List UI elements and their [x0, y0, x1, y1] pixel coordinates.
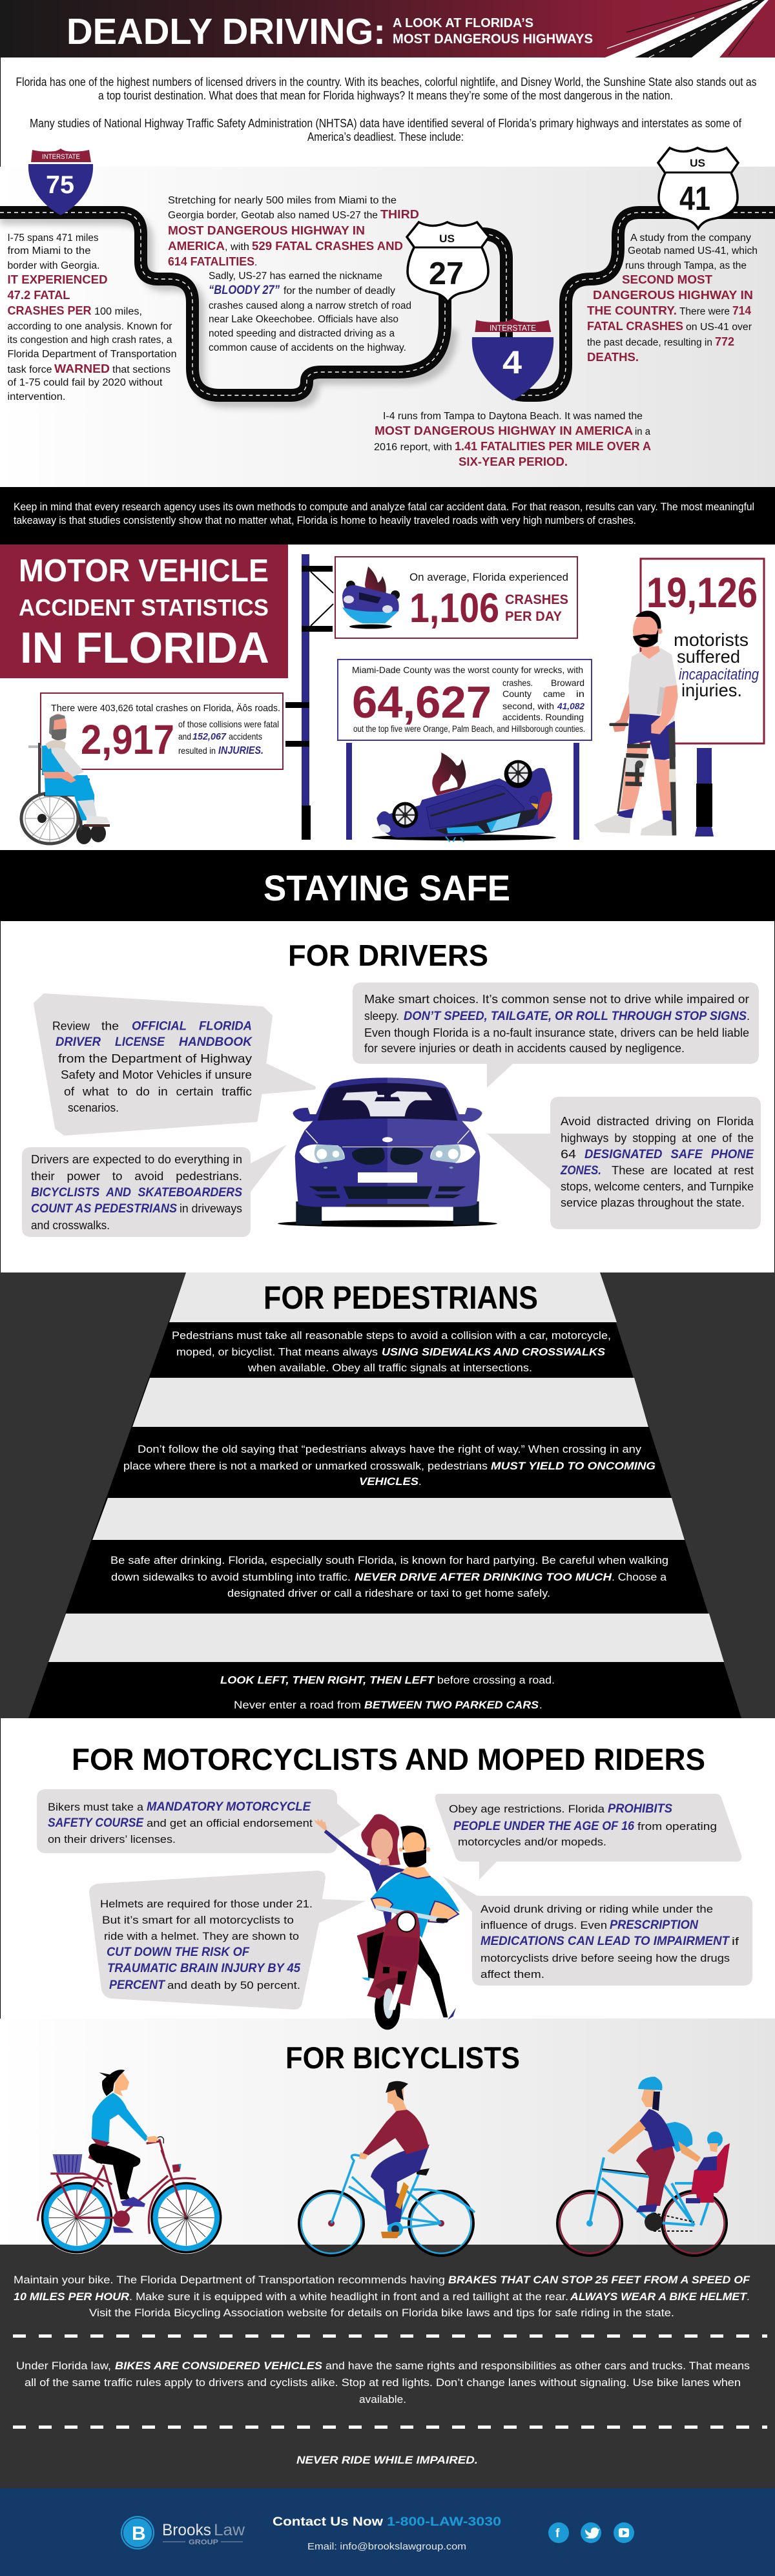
text: bikes are vehicles: Under Florida law,	[16, 2360, 111, 2372]
text: US-27: crashes caused along a narrow stretch of road	[209, 300, 411, 311]
text: I-75: that sections	[112, 364, 170, 375]
logo: Brooks Law Group: Brooks	[162, 2521, 211, 2539]
callout: driver handbook	[36, 995, 314, 1134]
callout: safe phone zones	[487, 1097, 761, 1229]
icon: US 41 shield	[658, 148, 738, 229]
text: US-27: MOST DANGEROUS HIGHWAY IN	[168, 224, 365, 237]
crosswalk stripes	[28, 1272, 741, 1718]
stat box: total crashes	[41, 693, 283, 769]
contact details: Email: info@brookslawgroup.com	[307, 2542, 466, 2552]
panel: for bicyclists background	[0, 2019, 775, 2245]
text: I-75: border with Georgia.	[8, 260, 99, 271]
text: I-4: in a	[635, 426, 650, 437]
stat box: crashes per day: CRASHES	[505, 592, 568, 607]
icon: man on blue step-through bicycle	[299, 2081, 475, 2256]
callout: driver handbook: OFFICIAL	[132, 1019, 187, 1034]
text: I-75: according to one analysis. Known for	[8, 321, 172, 332]
stat box: total crashes: INJURIES.	[218, 744, 264, 756]
callout: driver handbook: Safety and Motor Vehicles if unsure	[61, 1068, 252, 1081]
text: bikes are vehicles: all of the same traffic rules apply to drivers and cyclists alike. Stop at red lights. Don’t change lanes without signaling. Use bike lanes when	[25, 2377, 741, 2389]
text: yield to vehicles: VEHICLES	[359, 1475, 419, 1488]
callout: pedestrians and bicyclists: in driveways	[180, 1202, 242, 1215]
icon: interstate 75 sign: INTERSTATE	[42, 153, 80, 161]
text: safe after drinking: down sidewalks to avoid stumbling into traffic.	[111, 1572, 351, 1583]
callout: helmets: PERCENT	[109, 1979, 165, 1992]
callout: safety course: Bikers must take a	[48, 1801, 144, 1813]
icon: overturned car with flame	[372, 753, 556, 842]
stat box: worst county: second, with	[502, 701, 554, 711]
text: I-4: I-4 runs from Tampa to Daytona Beach. It was named the	[383, 411, 643, 422]
text: maintain your bike: 10 MILES PER HOUR	[14, 2290, 130, 2303]
callout: helmets: Helmets are required for those under 21.	[100, 1898, 313, 1910]
callout: pedestrians and bicyclists: BICYCLISTS AND SKATEBOARDERS	[31, 1186, 242, 1200]
callout: smart choices: .	[747, 1010, 750, 1023]
text: US-27	[168, 195, 419, 353]
text: US-41: on US-41 over	[686, 322, 752, 333]
sign post	[695, 748, 714, 836]
stat box: crashes per day	[335, 557, 577, 638]
callout: driver handbook: the	[101, 1019, 119, 1032]
stat box: total crashes: There were 403,626 total crashes on Florida, Äôs roads.	[51, 703, 280, 714]
text: never ride impaired: NEVER RIDE WHILE IMPAIRED.	[296, 2454, 478, 2466]
callout: helmets: ride with a helmet. They are shown to	[104, 1930, 299, 1942]
callout: driver handbook: from the Department of Highway	[58, 1052, 252, 1065]
callout: age restrictions	[435, 1794, 741, 1880]
text: US-41: There were	[679, 306, 730, 317]
text: I-75: task force	[8, 364, 52, 375]
text: US-27: AMERICA	[168, 240, 225, 253]
text: I-4	[374, 411, 651, 468]
callout: safe phone zones: These are located at rest	[612, 1164, 754, 1177]
callout: driver handbook: Review	[52, 1019, 90, 1032]
text: bikes are vehicles: available.	[359, 2394, 406, 2405]
intro text: America’s deadliest. These include:	[307, 130, 464, 143]
callout: safety course: SAFETY COURSE	[48, 1816, 144, 1830]
panel: bicycling tips	[0, 2245, 775, 2488]
icon: woman on red bicycle with basket	[37, 2070, 222, 2254]
callout: helmets: But it’s smart for all motorcyclists to	[102, 1914, 294, 1926]
callout: safety course: on their drivers’ licenses.	[48, 1833, 176, 1845]
subtitle: A LOOK AT FLORIDA’S	[393, 16, 533, 30]
callout: safe phone zones: highways by stopping at one of the	[561, 1132, 754, 1145]
stat box: total crashes: 2,917	[81, 716, 174, 763]
callout: age restrictions: PROHIBITS	[608, 1802, 672, 1816]
text: look left, parked cars: Never enter a road from	[234, 1699, 361, 1711]
callout: safe phone zones: 64	[561, 1148, 576, 1161]
stat box: incapacitating injuries	[641, 559, 764, 743]
text: safe after drinking: NEVER DRIVE AFTER DRINKING TOO MUCH	[355, 1571, 612, 1583]
icon: highway in perspective	[605, 0, 769, 57]
text: US-41	[587, 233, 758, 364]
callout: safe phone zones: stops, welcome centers, and Turnpike	[561, 1180, 754, 1193]
text: US-41: SECOND MOST	[622, 273, 712, 286]
panel: for motorcyclists	[37, 1742, 752, 2010]
sign pole with brackets	[285, 554, 333, 840]
callout: safety course: MANDATORY MOTORCYCLE	[147, 1800, 311, 1814]
heading: statistics: IN FLORIDA	[20, 623, 269, 672]
callout: safe phone zones: Avoid distracted driving on Florida	[561, 1115, 754, 1128]
text: US-41: A study from the company	[630, 233, 751, 244]
callout: safety course	[37, 1789, 361, 1853]
text: US-27: Sadly, US-27 has earned the nickname	[209, 271, 382, 282]
callout: driver handbook: of what to do in certain traffic	[64, 1085, 252, 1098]
icon: interstate 4 sign: INTERSTATE	[490, 323, 536, 333]
text: maintain your bike: .	[747, 2291, 750, 2303]
icon: US 41 shield: 41	[679, 180, 710, 218]
stat box: crashes per day: 1,106	[409, 585, 499, 631]
callout: driver handbook: scenarios.	[68, 1101, 119, 1114]
icon: social media: f	[555, 2527, 560, 2540]
text: US-27: noted speeding and distracted driving as a	[209, 328, 395, 339]
text: US-41: DANGEROUS HIGHWAY IN	[593, 289, 753, 302]
stat box: worst county: 41,082	[557, 701, 584, 711]
intro text	[16, 76, 757, 143]
text: US-27: Stretching for nearly 500 miles from Miami to the	[168, 195, 397, 206]
text: bikes are vehicles: BIKES ARE CONSIDERED VEHICLES	[115, 2360, 323, 2372]
text: maintain your bike: . Make sure it is equipped with a white headlight in front and a red taillight at the rear.	[129, 2291, 568, 2303]
text: yield to vehicles: MUST YIELD TO ONCOMING	[491, 1460, 656, 1472]
callout: pedestrians and bicyclists: COUNT AS PEDESTRIANS	[31, 1202, 177, 1216]
callout: safe phone zones: DESIGNATED SAFE PHONE	[584, 1148, 754, 1161]
stat box: worst county: in	[576, 689, 584, 699]
callout: drunk driving and medication: Avoid drunk driving or riding while under the	[480, 1903, 713, 1915]
stat box: worst county: 64,627	[352, 677, 491, 727]
callout: safety course: and get an official endorsement	[147, 1817, 313, 1829]
callout: smart choices: Even though Florida is a no-fault insurance state, drivers can be held liable	[364, 1026, 749, 1039]
callout: helmets: TRAUMATIC BRAIN INJURY BY 45	[107, 1962, 300, 1975]
stat box: worst county: Miami-Dade County was the worst county for wrecks, with	[352, 665, 583, 675]
text: sidewalks and crosswalks	[172, 1330, 611, 1374]
icon: US 41 shield: US	[690, 157, 705, 169]
panel: for drivers	[22, 939, 761, 1237]
callout: age restrictions: from operating	[637, 1820, 717, 1833]
callout: smart choices: for severe injuries or death in accidents caused by negligence.	[364, 1042, 685, 1055]
heading: statistics: MOTOR VEHICLE	[19, 554, 269, 588]
text: US-27: THIRD	[380, 208, 419, 221]
subtitle: MOST DANGEROUS HIGHWAYS	[393, 32, 593, 47]
callout: pedestrians and bicyclists: and crosswalks.	[31, 1219, 110, 1232]
heading band: staying safe	[0, 850, 775, 921]
logo: Brooks Law Group: GROUP	[189, 2539, 218, 2546]
heading band: staying safe: STAYING SAFE	[264, 867, 510, 908]
text: US-27: 529 FATAL CRASHES AND	[252, 240, 403, 253]
callout: driver handbook: DRIVER	[56, 1035, 101, 1049]
callout: age restrictions: Obey age restrictions. Florida	[449, 1803, 605, 1815]
icon: social media	[548, 2522, 634, 2543]
text: I-75: IT EXPERIENCED	[8, 273, 107, 286]
icon: cyclist with helmet, backpack and child seat	[557, 2077, 730, 2256]
subtitle	[393, 16, 593, 47]
text: yield to vehicles: Don’t follow the old saying that “pedestrians always have the right of way.” When crossing in any	[138, 1444, 642, 1455]
stat box: worst county: out the top five were Orange, Palm Beach, and Hillsborough counties.	[353, 723, 585, 734]
text: I-75: Florida Department of Transportation	[8, 349, 177, 360]
callout: driver handbook: FLORIDA	[199, 1019, 252, 1034]
text: I-75: CRASHES PER	[8, 304, 92, 317]
callout: smart choices: sleepy.	[364, 1010, 399, 1023]
callout: drunk driving and medication: affect them.	[480, 1968, 544, 1980]
stat box: incapacitating injuries: suffered	[677, 647, 740, 667]
text: US-41: 772	[715, 335, 734, 348]
text: maintain your bike: Maintain your bike. The Florida Department of Transportation recommends having	[14, 2274, 445, 2286]
icon: US 27 shield: 27	[429, 256, 464, 291]
text: I-75: WARNED	[54, 362, 110, 375]
callout: drunk driving and medication	[442, 1876, 752, 1986]
text: look left, parked cars: .	[539, 1699, 542, 1711]
title: DEADLY DRIVING:	[67, 11, 386, 52]
text: I-4: SIX-YEAR PERIOD.	[459, 455, 568, 468]
text: safe after drinking: designated driver or call a rideshare or taxi to get home safely.	[227, 1588, 550, 1599]
text: US-27: Georgia border, Geotab also named US-27 the	[168, 210, 378, 221]
text: maintain your bike: Visit the Florida Bicycling Association website for details on Florida bike laws and tips for safe riding in the state.	[89, 2307, 674, 2319]
text: I-4: 1.41 FATALITIES PER MILE OVER A	[455, 440, 651, 453]
text: I-4: MOST DANGEROUS HIGHWAY IN AMERICA	[375, 424, 633, 437]
panel: for pedestrians	[0, 1272, 775, 1718]
icon: overturned burning car	[342, 566, 400, 629]
stat box: worst county	[338, 660, 592, 740]
road winding between the highway signs	[0, 213, 775, 402]
heading: for bicyclists: FOR BICYCLISTS	[285, 2041, 520, 2075]
text: I-75: from Miami to the	[8, 245, 90, 256]
text: I-4: 2016 report, with	[374, 442, 452, 453]
callout: pedestrians and bicyclists: their power to avoid pedestrians.	[31, 1170, 242, 1183]
text: maintain your bike	[14, 2274, 750, 2319]
callout: driver handbook: HANDBOOK	[179, 1035, 253, 1049]
heading: statistics: ACCIDENT STATISTICS	[19, 594, 269, 621]
callout: drunk driving and medication: if	[732, 1935, 739, 1948]
contact details: Contact Us Now	[273, 2515, 383, 2529]
callout: age restrictions: motorcycles and/or mopeds.	[458, 1836, 606, 1848]
text: sidewalks and crosswalks: Pedestrians must take all reasonable steps to avoid a collision with a car, motorcycle,	[172, 1330, 611, 1342]
contact details	[273, 2515, 501, 2552]
heading: statistics	[0, 545, 288, 678]
text: yield to vehicles	[123, 1444, 656, 1488]
stat box: total crashes: of those collisions were fatal	[178, 719, 279, 729]
text: US-27: for the number of deadly	[284, 286, 395, 296]
icon: interstate 75 sign: 75	[46, 171, 74, 199]
panel: highways	[0, 148, 775, 487]
text: I-75: 47.2 FATAL	[8, 289, 70, 302]
text: US-27: “BLOODY 27”	[209, 284, 280, 297]
text: sidewalks and crosswalks: USING SIDEWALKS AND CROSSWALKS	[382, 1346, 606, 1358]
text: US-41: THE COUNTRY.	[587, 304, 677, 317]
icon: US 27 shield: US	[439, 233, 455, 245]
callout: smart choices	[353, 982, 759, 1088]
text: sidewalks and crosswalks: moped, or bicyclist. That means always	[176, 1346, 378, 1358]
stat box: incapacitating injuries: 19,126	[646, 568, 758, 616]
callout: helmets: and death by 50 percent.	[167, 1979, 300, 1991]
text: US-27: , with	[225, 242, 249, 253]
logo: Brooks Law Group: B	[132, 2523, 146, 2544]
text: safe after drinking	[110, 1555, 668, 1599]
text: US-41: the past decade, resulting in	[587, 337, 712, 348]
stat box: worst county: came	[543, 689, 565, 699]
panel: motor vehicle statistics	[0, 545, 764, 844]
text: bikes are vehicles: and have the same rights and responsibilities as other cars and trucks. That means	[326, 2360, 750, 2372]
text: sidewalks and crosswalks: when available. Obey all traffic signals at intersections.	[247, 1362, 532, 1374]
text: US-27: common cause of accidents on the highway.	[209, 342, 406, 353]
stat box: worst county: crashes.	[502, 678, 533, 688]
text: look left, parked cars: LOOK LEFT, THEN RIGHT, THEN LEFT	[220, 1674, 435, 1686]
heading: for motorcyclists: FOR MOTORCYCLISTS AND MOPED RIDERS	[72, 1742, 705, 1776]
text: look left, parked cars	[220, 1674, 555, 1711]
stat box: worst county: County	[502, 689, 532, 699]
callout: driver handbook: LICENSE	[115, 1035, 165, 1049]
text: I-75: I-75 spans 471 miles	[8, 233, 99, 244]
callout: safe phone zones: service plazas throughout the state.	[561, 1196, 745, 1209]
stat box: worst county: Broward	[551, 678, 584, 688]
callout: smart choices: DON’T SPEED, TAILGATE, OR ROLL THROUGH STOP SIGNS	[404, 1010, 747, 1023]
icon: US 27 shield	[407, 222, 489, 302]
text: US-41: FATAL CRASHES	[587, 320, 683, 333]
text: US-27: near Lake Okeechobee. Officials have also	[209, 314, 398, 325]
logo: Brooks Law Group	[121, 2516, 245, 2550]
text: I-75: of 1-75 could fail by 2020 without	[8, 377, 163, 388]
heading: for drivers: FOR DRIVERS	[288, 939, 488, 972]
text: look left, parked cars: BETWEEN TWO PARKED CARS	[364, 1699, 539, 1711]
callout: smart choices: Make smart choices. It’s common sense not to drive while impaired or	[364, 993, 749, 1006]
callout: pedestrians and bicyclists	[22, 1145, 287, 1237]
stat box: total crashes: 152,067	[192, 731, 227, 742]
text: US-41: Geotab named US-41, which	[628, 245, 758, 256]
logo: Brooks Law Group: Law	[214, 2521, 245, 2539]
stat box: total crashes: accidents	[229, 731, 262, 742]
footer	[0, 2488, 775, 2576]
text: US-41: DEATHS.	[587, 351, 639, 364]
icon: interstate 4 sign: 4	[502, 344, 522, 380]
text: safe after drinking: Be safe after drinking. Florida, especially south Florida, is known for hard partying. Be careful when walking	[110, 1555, 668, 1566]
text: yield to vehicles: .	[418, 1476, 422, 1488]
stat box: incapacitating injuries: injuries.	[681, 680, 742, 700]
text: safe after drinking: . Choose a	[612, 1572, 667, 1583]
icon: car front view	[278, 1077, 497, 1227]
black note band	[0, 487, 775, 545]
icon: man on crutches	[594, 611, 679, 836]
icon: interstate 4 sign	[472, 318, 553, 400]
stat box: incapacitating injuries: incapacitating	[679, 666, 760, 683]
callout: drunk driving and medication: PRESCRIPTION	[610, 1918, 699, 1932]
heading: for pedestrians: FOR PEDESTRIANS	[264, 1280, 538, 1316]
contact details: 1-800-LAW-3030	[387, 2515, 501, 2529]
stat box: total crashes: and	[178, 731, 191, 742]
text: US-41: 714	[732, 304, 751, 317]
icon: person in wheelchair	[21, 714, 110, 844]
icon: couple on moped	[315, 1814, 460, 2030]
stat box: incapacitating injuries: motorists	[674, 630, 749, 650]
text: US-41: runs through Tampa, as the	[625, 260, 747, 271]
callout: helmets: CUT DOWN THE RISK OF	[107, 1946, 250, 1959]
callout: pedestrians and bicyclists: Drivers are expected to do everything in	[31, 1153, 242, 1166]
text: bikes are vehicles	[16, 2360, 750, 2405]
header banner	[0, 0, 775, 57]
text: I-75: 100 miles,	[94, 306, 142, 317]
text: US-27: 614 FATALITIES	[168, 255, 254, 268]
callout: drunk driving and medication: motorcyclists drive before seeing how the drugs	[480, 1952, 730, 1964]
icon: interstate 75 sign	[28, 149, 93, 215]
text: look left, parked cars: before crossing a road.	[437, 1674, 555, 1686]
text: maintain your bike: BRAKES THAT CAN STOP 25 FEET FROM A SPEED OF	[448, 2274, 750, 2286]
stat box: crashes per day: On average, Florida experienced	[409, 571, 568, 583]
text: I-75: intervention.	[8, 391, 66, 402]
text: I-75	[8, 233, 177, 402]
callout: safe phone zones: ZONES.	[560, 1164, 601, 1178]
stat box: total crashes: resulted in	[178, 745, 216, 756]
text: US-27: .	[254, 257, 257, 268]
text: maintain your bike: ALWAYS WEAR A BIKE HELMET	[570, 2290, 748, 2303]
stat box: crashes per day: PER DAY	[505, 609, 562, 624]
sign legs	[346, 743, 579, 840]
callout: drunk driving and medication: influence of drugs. Even	[480, 1919, 607, 1931]
callout: age restrictions: PEOPLE UNDER THE AGE OF 16	[453, 1820, 634, 1833]
callout: helmets	[89, 1871, 366, 2010]
text: I-75: its congestion and high crash rates, a	[8, 335, 172, 346]
black note band: takeaway is that studies consistently show that no matter what, Florida is home to heavily traveled roads with very high numbers of crashes.	[14, 514, 636, 526]
text: yield to vehicles: place where there is not a marked or unmarked crosswalk, pedestrians	[123, 1460, 488, 1472]
callout: drunk driving and medication: MEDICATIONS CAN LEAD TO IMPAIRMENT	[480, 1935, 730, 1948]
stat box: worst county: accidents. Rounding	[502, 712, 584, 722]
intro text: a top tourist destination. What does that mean for Florida highways? It means they’re some of the most dangerous in the nation.	[98, 89, 673, 102]
